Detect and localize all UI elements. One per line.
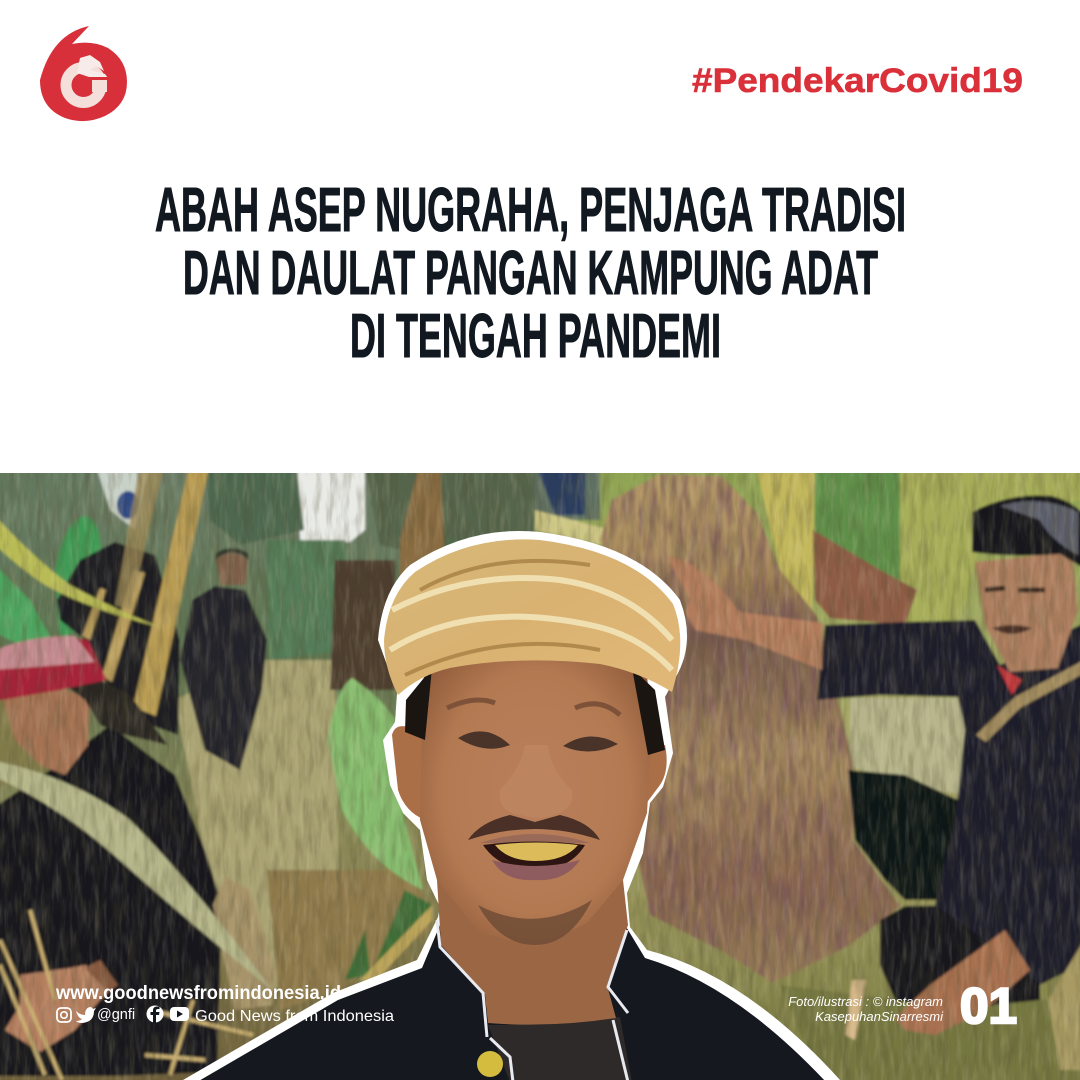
jacket bbox=[197, 925, 826, 1080]
arm on sheaf bbox=[667, 556, 823, 670]
forearm and hand bbox=[895, 930, 1030, 1035]
eyes bbox=[458, 731, 510, 749]
sack bbox=[213, 877, 275, 1010]
light straw texture overlay bbox=[0, 473, 1080, 1080]
hair sides bbox=[405, 668, 665, 755]
photo credit bbox=[788, 994, 944, 1024]
eyebrows bbox=[447, 700, 620, 715]
icon: youtube bbox=[170, 1007, 189, 1021]
nose bbox=[500, 745, 572, 818]
straw strands bbox=[0, 910, 253, 1080]
background photo bbox=[0, 463, 1080, 1080]
dry grass centre bbox=[175, 660, 340, 1000]
page number: 01 bbox=[960, 978, 1017, 1034]
green blades bbox=[345, 890, 432, 980]
button bbox=[477, 1051, 503, 1077]
bamboo poles bbox=[133, 463, 210, 716]
hands bbox=[5, 965, 115, 1052]
icon: instagram bbox=[57, 1008, 71, 1022]
head bbox=[975, 552, 1078, 672]
person: far worker 1 bbox=[57, 542, 180, 735]
ears bbox=[392, 726, 667, 820]
collar piping bbox=[437, 920, 628, 1080]
emblem bbox=[66, 55, 108, 102]
person: far worker 2 bbox=[180, 586, 267, 770]
handle: @gnfi bbox=[97, 1007, 135, 1023]
photo: right rice field scene bbox=[535, 463, 1080, 1080]
portrait cutout: man with turban bbox=[183, 531, 840, 1080]
neck bbox=[437, 880, 628, 1025]
grain sheaf bbox=[600, 474, 900, 989]
website: www.goodnewsfromindonesia.id bbox=[55, 983, 341, 1004]
banana leaf beside portrait bbox=[328, 678, 423, 890]
title bbox=[155, 176, 906, 371]
tall grass bbox=[755, 463, 815, 610]
soil bbox=[813, 530, 917, 625]
leaf blade across worker bbox=[0, 760, 272, 990]
banana leaves left background bbox=[55, 516, 102, 640]
photo credit: KasepuhanSinarresmi bbox=[815, 1009, 944, 1024]
moustache bbox=[468, 815, 600, 840]
leaf blade top bbox=[0, 519, 155, 627]
blue hat bbox=[117, 491, 139, 519]
seated man on right bbox=[667, 495, 1080, 1035]
legs bbox=[848, 770, 958, 900]
white outline silhouette bbox=[183, 531, 840, 1080]
person: seated left worker bbox=[0, 636, 275, 1076]
bamboo structure bbox=[330, 560, 395, 690]
photo credit: Foto/ilustrasi : © instagram bbox=[788, 994, 943, 1009]
footer: website and socials bbox=[55, 983, 394, 1025]
icon: facebook bbox=[146, 1006, 164, 1023]
mouth and teeth bbox=[483, 842, 585, 870]
rope and red shirt bbox=[976, 657, 1080, 742]
face bbox=[420, 650, 652, 947]
mid green foliage bbox=[265, 540, 350, 660]
torso and sleeve bbox=[817, 620, 1080, 985]
lower lip bbox=[492, 860, 580, 880]
sky bbox=[296, 463, 365, 542]
bracelet bbox=[85, 960, 118, 992]
far worker head bbox=[216, 553, 248, 585]
grass texture overlay bbox=[0, 473, 1080, 1080]
hashtag: #PendekarCovid19 bbox=[692, 62, 1023, 100]
turban bbox=[384, 539, 680, 695]
photo: left rice field scene bbox=[0, 463, 535, 1080]
turban bbox=[972, 495, 1080, 572]
turban folds bbox=[390, 578, 672, 670]
logo: GNFI red six with G emblem bbox=[40, 26, 127, 121]
flattened straw bbox=[850, 698, 975, 796]
upper lip bbox=[480, 834, 590, 843]
dark undershirt bbox=[488, 1017, 632, 1080]
channel name: Good News from Indonesia bbox=[195, 1008, 394, 1025]
stubble bbox=[478, 900, 592, 945]
icon: twitter bbox=[76, 1007, 96, 1023]
title line 3: DI TENGAH PANDEMI bbox=[350, 302, 721, 371]
